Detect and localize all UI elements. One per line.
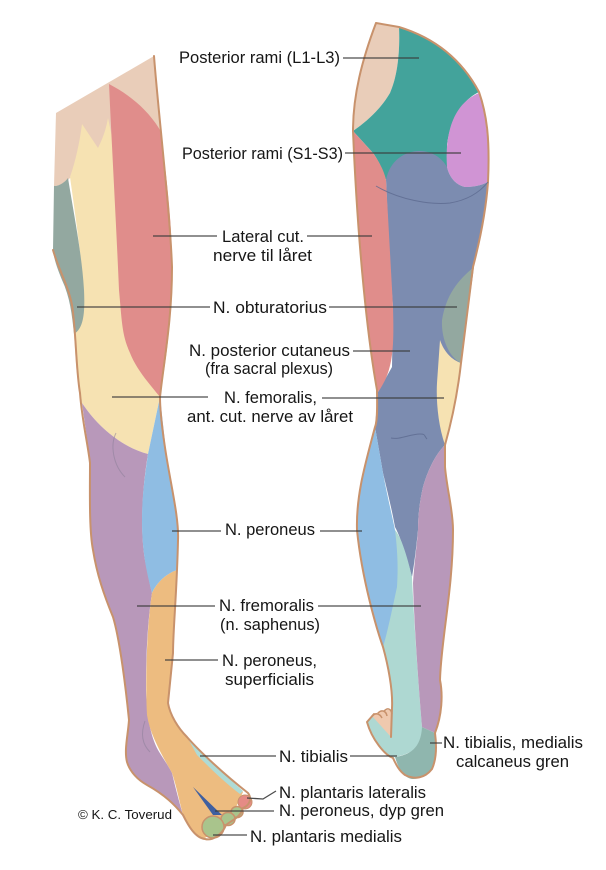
right leg (back view) — [353, 23, 489, 779]
label: fremoralis: (n. saphenus) — [220, 616, 320, 634]
icon: toes, back view — [372, 709, 392, 737]
label: peroneus dyp gren: N. peroneus, dyp gren — [279, 802, 444, 820]
left leg (front view) — [53, 56, 252, 839]
label: fremoralis — [219, 597, 320, 634]
region: peroneal, front — [142, 397, 178, 593]
label: plantaris lateralis: N. plantaris lateralis — [279, 784, 426, 802]
labels — [78, 49, 583, 846]
region: posterior rami lumbar — [353, 23, 399, 131]
label: tibialis medialis: calcaneus gren — [456, 753, 569, 771]
label: peroneus superficialis — [222, 652, 317, 689]
region: lateral cutaneous nerve — [109, 84, 172, 397]
region: peroneal, back — [357, 427, 398, 647]
region: medial calcaneal, heel — [395, 727, 436, 779]
label: fremoralis: N. fremoralis — [219, 597, 314, 615]
label: tibialis: N. tibialis — [279, 748, 348, 766]
region: obturator, back — [442, 267, 474, 363]
label: femoralis — [187, 389, 353, 426]
label: lateral cutaneous: Lateral cut. — [222, 228, 304, 246]
label: peroneus superficialis: N. peroneus, — [222, 652, 317, 670]
label: posterior cutaneus — [189, 342, 350, 378]
contour: knee crease — [391, 434, 427, 439]
icon: toes, medial plantar — [202, 806, 243, 838]
label: plantaris medialis: N. plantaris medialis — [250, 828, 402, 846]
region: obturator, front — [53, 178, 84, 334]
credit: © K. C. Toverud — [78, 807, 172, 822]
leader lines — [77, 58, 461, 835]
region: saphenous, back — [413, 445, 453, 733]
region: posterior rami sacral, pink — [447, 93, 488, 187]
region: posterior rami, hip — [54, 56, 160, 186]
label: posterior cutaneus: N. posterior cutaneus — [189, 342, 350, 360]
label: peroneus: N. peroneus — [225, 521, 315, 539]
label: lateral cutaneous — [213, 228, 312, 265]
region: superficial peroneal, foot — [146, 570, 243, 838]
contour: thigh crease — [113, 433, 125, 477]
region: femoral, back — [437, 340, 461, 445]
label: femoralis: ant. cut. nerve av låret — [187, 408, 353, 426]
region: femoral anterior cutaneous — [70, 118, 160, 454]
icon: deep peroneal wedge — [193, 787, 222, 815]
contour: outline of left leg — [53, 56, 250, 839]
label: posterior cutaneus: (fra sacral plexus) — [205, 360, 333, 378]
label: obturatorius: N. obturatorius — [213, 299, 327, 317]
label: lateral cutaneous: nerve til låret — [213, 247, 312, 265]
contour: outline of right leg — [353, 23, 489, 778]
label: tibialis medialis: N. tibialis, medialis — [443, 734, 583, 752]
label: posterior rami L1-L3: Posterior rami (L1-L3) — [179, 49, 340, 67]
label: peroneus superficialis: superficialis — [225, 671, 314, 689]
icon: lateral plantar toe — [238, 795, 252, 809]
label: femoralis: N. femoralis, — [224, 389, 317, 407]
region: tibial, back — [367, 530, 422, 758]
contour: buttock fold — [376, 182, 488, 203]
region: tibial strip, foot — [187, 737, 243, 794]
label: posterior rami S1-S3: Posterior rami (S1-S3) — [182, 145, 343, 163]
region: lateral cutaneous, back — [353, 131, 393, 392]
label: tibialis medialis — [443, 734, 583, 771]
region: posterior rami, teal — [353, 27, 479, 180]
contour: ankle crease — [143, 721, 150, 752]
region: posterior cutaneous, slate — [375, 151, 488, 577]
region: saphenous, front — [82, 403, 183, 815]
